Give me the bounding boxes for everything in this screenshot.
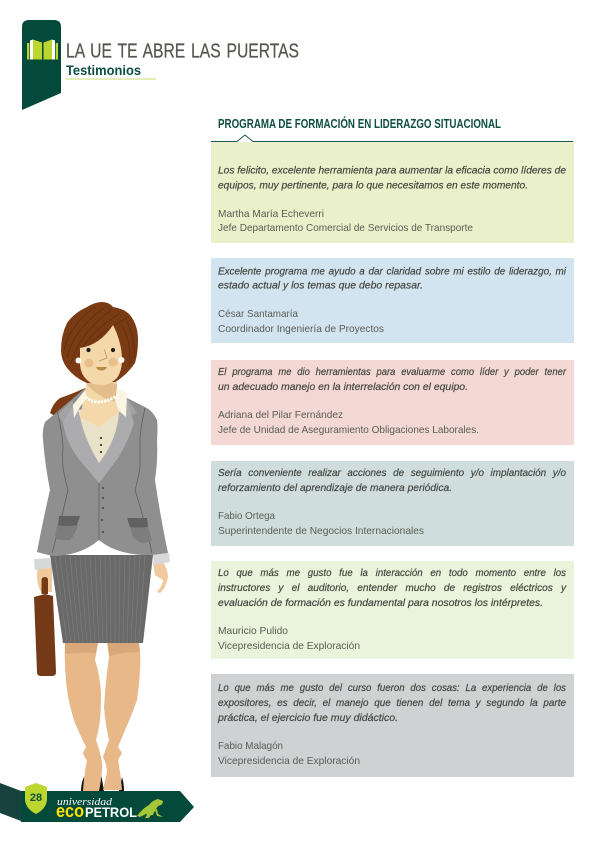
shirt collar <box>73 388 127 418</box>
blouse <box>78 410 122 463</box>
hair back <box>61 302 138 383</box>
icon: open book <box>27 40 58 60</box>
nose <box>99 349 107 361</box>
panel: testimonial 5: instructores y el auditorio, entender mucho de registros eléctricos y <box>218 583 567 594</box>
pocket shadows <box>55 525 152 543</box>
panel: testimonial 2: Coordinador Ingeniería de Proyectos <box>218 324 384 335</box>
blazer <box>37 388 168 556</box>
panel: testimonial 3: Adriana del Pilar Fernández <box>218 410 343 421</box>
panel: testimonial 4: reforzamiento del aprendizaje de manera periódica. <box>218 483 452 494</box>
blouse buttons <box>100 437 102 453</box>
panel: testimonial 5: evaluación de formación es fundamental para nosotros los intérpretes. <box>218 598 543 609</box>
eyes <box>86 348 91 352</box>
lighter upper collar pieces <box>57 398 137 422</box>
heading rule with notch <box>211 135 573 142</box>
panel: testimonial 5 <box>211 561 574 659</box>
panel: testimonial 2 <box>211 258 574 343</box>
face <box>80 325 122 385</box>
shoes <box>81 774 124 791</box>
panel: testimonial 1: equipos, muy pertinente, para lo que necesitamos en este momento. <box>218 180 528 192</box>
panel: testimonial 4 <box>211 461 574 546</box>
footer ribbon: eco <box>56 801 84 821</box>
footer ribbon <box>0 783 194 822</box>
briefcase <box>34 577 56 676</box>
panel: testimonial 4: Sería conveniente realizar acciones de seguimiento y/o implantación y/o <box>218 468 566 479</box>
footer ribbon: PETROL <box>85 804 137 820</box>
hands <box>37 562 52 592</box>
panel: testimonial 5: Vicepresidencia de Exploración <box>218 641 360 652</box>
panel: testimonial 3: Jefe de Unidad de Aseguramiento Obligaciones Laborales. <box>218 425 479 436</box>
mouth <box>96 367 107 371</box>
panel: testimonial 1: Jefe Departamento Comercial de Servicios de Transporte <box>218 223 473 234</box>
panel: testimonial 2: estado actual y los temas que debo repasar. <box>218 280 423 292</box>
panel: testimonial 6: Vicepresidencia de Exploración <box>218 756 360 767</box>
panel: testimonial 3 <box>211 360 574 445</box>
subtitle: Testimonios <box>66 63 141 78</box>
cuffs <box>34 553 170 570</box>
panel: testimonial 1 <box>211 135 574 243</box>
icon: iguana <box>137 799 163 818</box>
legs <box>65 643 102 791</box>
neck and chest <box>80 378 119 427</box>
skirt <box>50 555 153 643</box>
header bookmark with book icon <box>22 20 61 110</box>
blazer buttons <box>101 487 104 533</box>
page number badge <box>25 783 47 814</box>
hair strands <box>64 307 134 365</box>
panel: testimonial 3: un adecuado manejo en la interrelación con el equipo. <box>218 382 468 393</box>
section heading: PROGRAMA DE FORMACIÓN EN LIDERAZGO SITUACIONAL <box>218 116 501 131</box>
logo text: universidad <box>57 796 113 808</box>
page number badge: 28 <box>30 792 42 804</box>
panel: testimonial 6: práctica, el ejercicio fue muy didáctico. <box>217 713 398 724</box>
subtitle underline <box>66 78 156 80</box>
pearl necklace <box>86 396 116 402</box>
title: LA UE TE ABRE LAS PUERTAS <box>66 40 299 62</box>
ponytail <box>50 388 88 418</box>
blazer seams <box>52 408 152 553</box>
panel: testimonial 6: expositores, es decir, el manejo que tienen del tema y segundo la parte <box>218 698 566 709</box>
panel: testimonial 2: César Santamaría <box>218 309 298 320</box>
illustration: businesswoman <box>34 302 170 791</box>
panel: testimonial 1: Martha María Echeverri <box>218 209 324 220</box>
pockets <box>58 516 148 528</box>
blazer lapels <box>63 400 134 483</box>
panel: testimonial 6: Fabio Malagón <box>218 741 283 752</box>
earrings <box>76 358 82 364</box>
panel: testimonial 5: Mauricio Pulido <box>218 626 288 637</box>
cheeks <box>84 358 94 368</box>
panel: testimonial 2: Excelente programa me ayudo a dar claridad sobre mi estilo de liderazgo, mi <box>218 266 567 278</box>
panel: testimonial 3: El programa me dio herramientas para evaluarme como líder y poder tener <box>218 367 567 378</box>
panel: testimonial 5: Lo que más me gusto fue la interacción en todo momento entre los <box>218 568 566 579</box>
panel: testimonial 1: Los felicito, excelente herramienta para aumentar la eficacia como líderes de <box>218 166 566 176</box>
panel: testimonial 4: Fabio Ortega <box>218 511 275 522</box>
panel: testimonial 6: Lo que más me gusto del curso fueron dos cosas: La experiencia de los <box>218 683 566 694</box>
panel: testimonial 4: Superintendente de Negocios Internacionales <box>218 526 424 537</box>
panel: testimonial 6 <box>211 674 574 777</box>
